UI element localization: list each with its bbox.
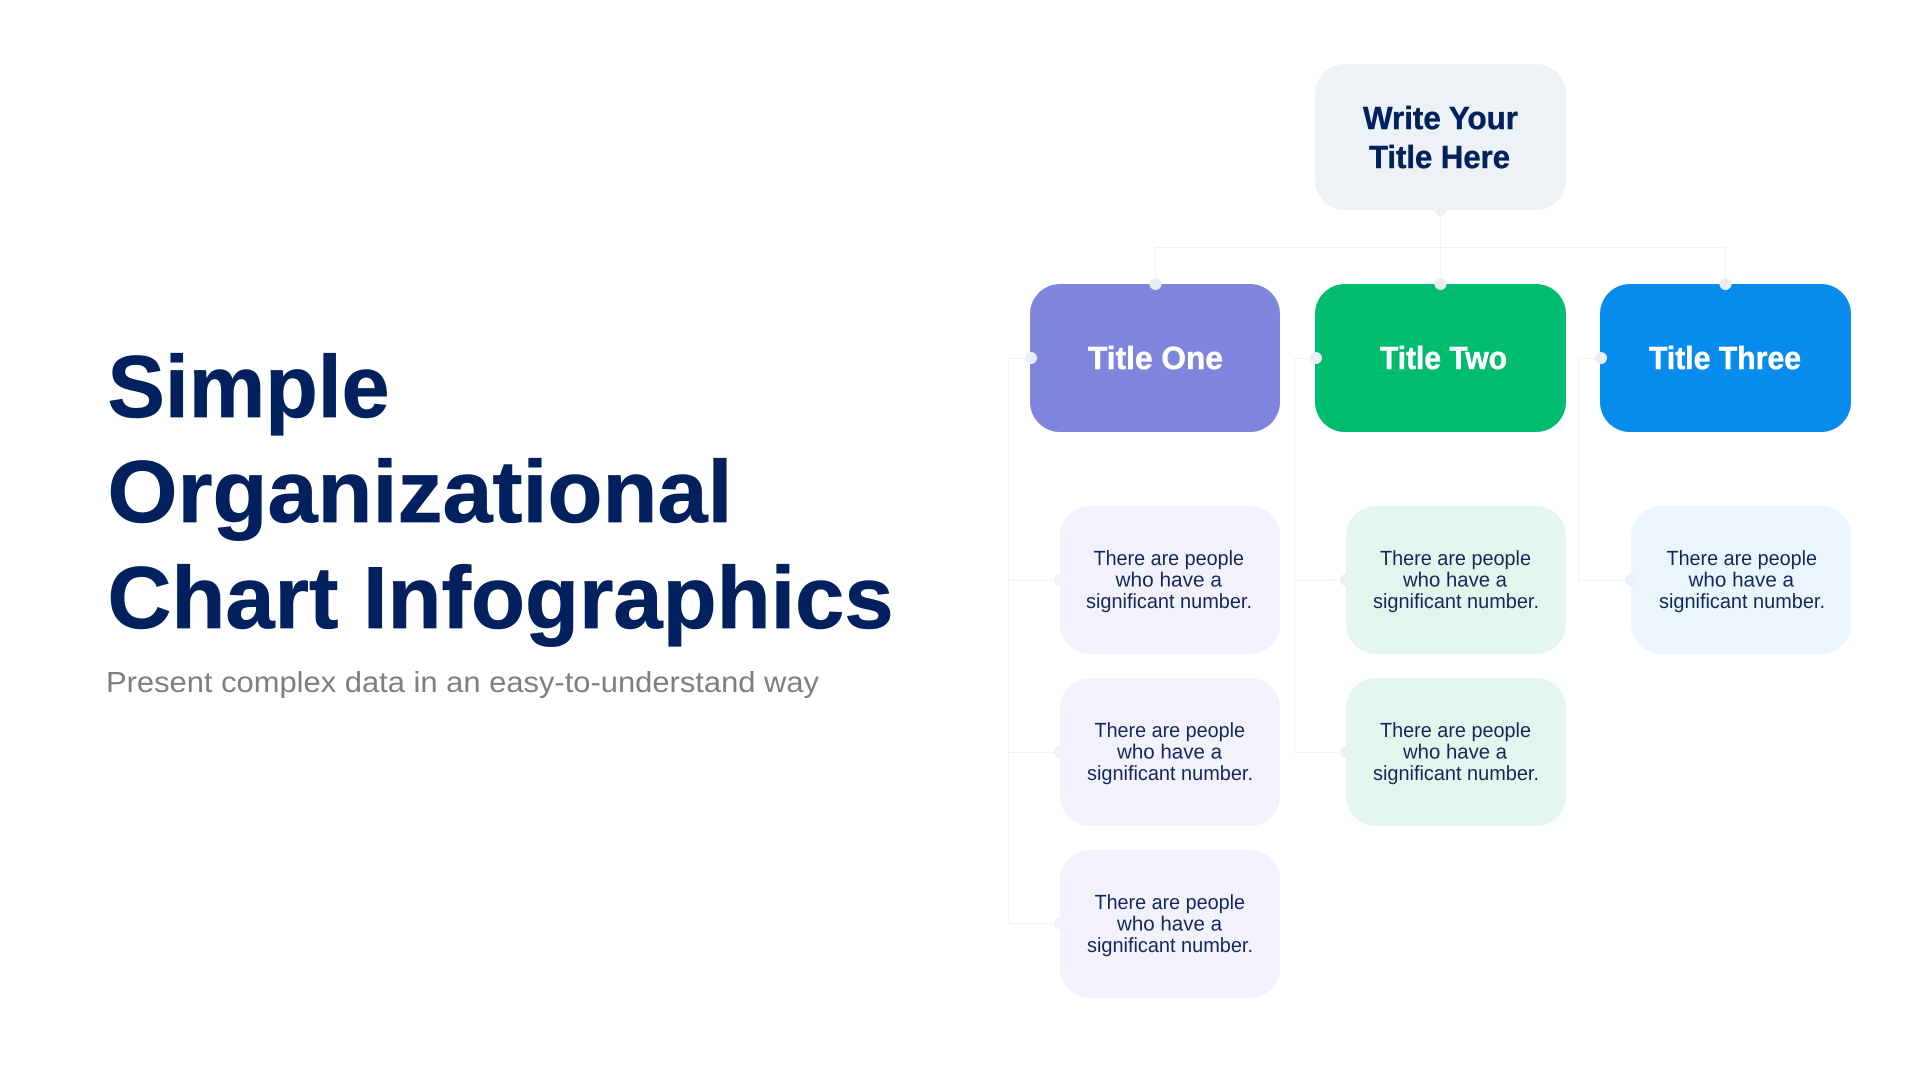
card: title two item 2: significant number.: [1373, 762, 1539, 785]
card: title two item 1: There are people: [1380, 547, 1531, 570]
card: title one item 1: significant number.: [1086, 590, 1252, 613]
card: title two item 1: significant number.: [1373, 590, 1539, 613]
node: title one: [1025, 278, 1280, 432]
subtitle: Present complex data in an easy-to-understand way: [106, 667, 820, 699]
node: title two: Title Two: [1380, 340, 1507, 376]
card: title one item 3: significant number.: [1087, 934, 1253, 957]
title: Organizational: [108, 442, 732, 541]
card: title three item 1: There are people: [1666, 547, 1817, 570]
card: title one item 2: There are people: [1094, 719, 1245, 742]
title: [108, 337, 894, 647]
node: title three: Title Three: [1649, 340, 1801, 376]
root node: Title Here: [1369, 139, 1510, 175]
card: title one item 3: There are people: [1094, 891, 1245, 914]
root node: Write Your: [1363, 100, 1518, 136]
card: title two item 1: [1340, 506, 1566, 654]
card: title one item 3: who have a: [1116, 912, 1223, 936]
card: title one item 1: There are people: [1094, 547, 1244, 570]
card: title three item 1: who have a: [1687, 568, 1795, 592]
card: title one item 1: [1054, 506, 1280, 654]
title: Simple: [108, 337, 390, 436]
card: title three item 1: significant number.: [1659, 590, 1825, 613]
card: title one item 1: who have a: [1114, 568, 1223, 592]
card: title two item 1: who have a: [1402, 568, 1508, 592]
card: title two item 2: who have a: [1402, 740, 1508, 764]
card: title two item 2: There are people: [1380, 719, 1531, 742]
card: title one item 3: [1054, 850, 1280, 998]
org chart connectors: [1008, 209, 1726, 924]
node: title one: Title One: [1088, 340, 1223, 376]
node: title three: [1595, 278, 1851, 432]
node: title two: [1310, 278, 1566, 432]
card: title three item 1: [1625, 506, 1851, 654]
card: title one item 2: [1054, 678, 1280, 826]
root node: [1315, 64, 1566, 216]
card: title one item 2: who have a: [1116, 740, 1223, 764]
title: Chart Infographics: [108, 548, 894, 647]
card: title one item 2: significant number.: [1087, 762, 1253, 785]
card: title two item 2: [1340, 678, 1566, 826]
